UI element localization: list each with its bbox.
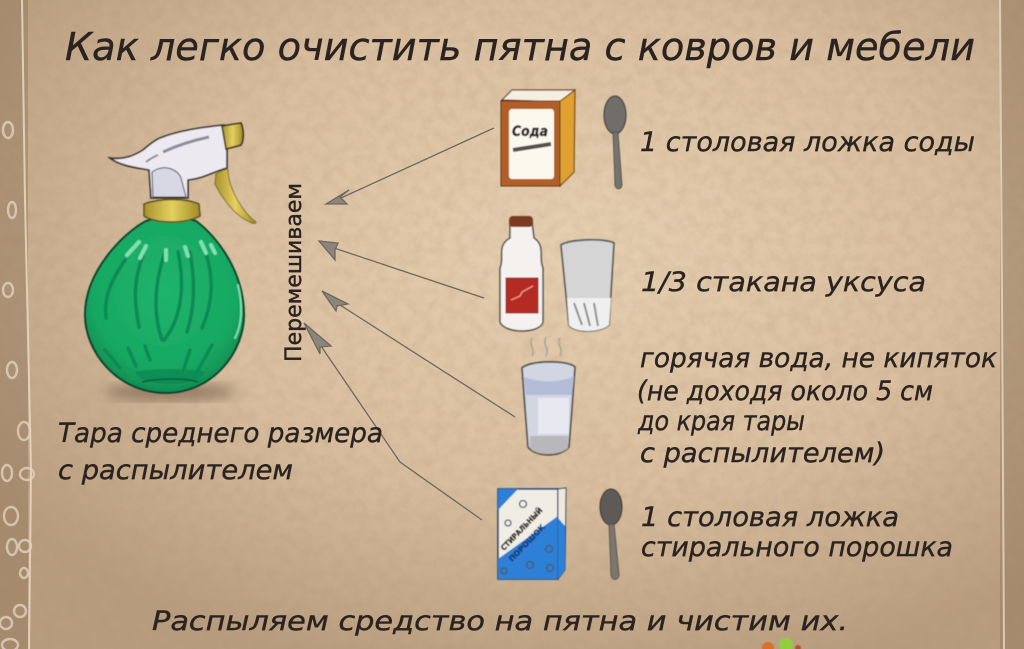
text: soda amount: 1 столовая ложка соды <box>640 127 975 158</box>
icon: spoon top <box>604 96 626 189</box>
text: container caption: с распылителем <box>58 455 293 486</box>
text: container caption <box>58 418 383 486</box>
icon: washing powder box: ПОРОШОК <box>507 522 547 563</box>
trigger <box>215 170 256 224</box>
text: water instructions: (не доходя около 5 см <box>637 376 933 407</box>
text: water instructions: до края тары <box>637 406 805 437</box>
icon: glass of vinegar <box>561 240 614 331</box>
text: powder amount: 1 столовая ложка <box>641 502 899 533</box>
icon: soda box: Сода <box>512 124 548 140</box>
text: water instructions <box>637 343 998 469</box>
text: vinegar amount: 1/3 стакана уксуса <box>641 267 926 298</box>
text: closing instruction: Распыляем средство на пятна и чистим их. <box>152 606 848 637</box>
arrow: vinegar <box>319 241 484 298</box>
spray head <box>110 125 227 198</box>
arrow: powder <box>304 323 482 520</box>
icon: soda box <box>501 90 575 186</box>
collar <box>144 200 200 222</box>
icon: washing powder box <box>498 488 566 579</box>
icon: spray bottle <box>85 123 256 401</box>
bottle body <box>85 217 244 393</box>
title: Как легко очистить пятна с ковров и мебели <box>65 25 975 69</box>
text: water instructions: с распылителем) <box>640 438 885 469</box>
icon: washing powder box: СТИРАЛЬНЫЙ <box>499 506 544 552</box>
arrow: soda <box>326 128 494 204</box>
left margin doodles <box>0 122 34 649</box>
icon: vinegar bottle <box>500 216 543 331</box>
decorative flower at bottom edge <box>762 638 801 649</box>
text: powder amount: стирального порошка <box>641 532 953 563</box>
icon: glass of hot water <box>522 337 575 455</box>
label: rotated mixing text: Перемешиваем <box>282 183 307 362</box>
arrow: water <box>322 291 515 417</box>
text: water instructions: горячая вода, не кипяток <box>640 343 998 374</box>
arrows <box>304 128 515 520</box>
icon: spoon bottom <box>600 489 622 580</box>
text: powder amount <box>641 502 953 563</box>
nozzle <box>222 123 243 149</box>
text: container caption: Тара среднего размера <box>58 418 383 449</box>
